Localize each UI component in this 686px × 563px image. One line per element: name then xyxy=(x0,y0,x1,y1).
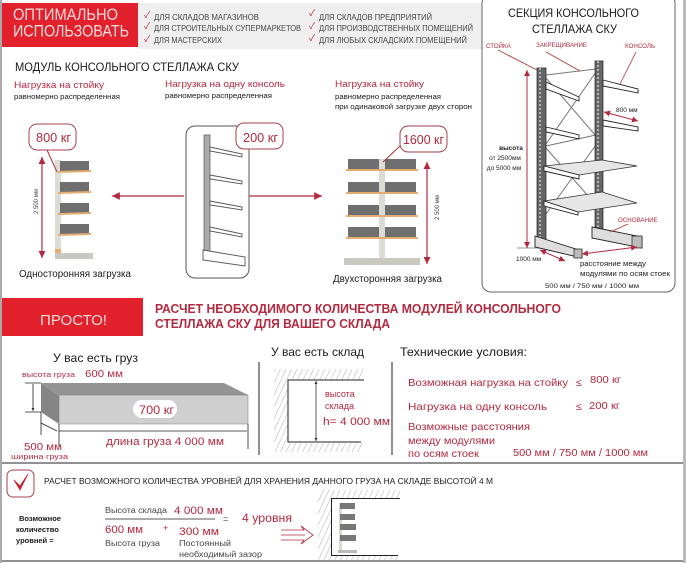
arrow: outline xyxy=(281,526,313,544)
section: cargo: длина груза 4 000 мм xyxy=(106,436,224,448)
heading: calculation: РАСЧЕТ НЕОБХОДИМОГО КОЛИЧЕСТВА МОДУЛЕЙ КОНСОЛЬНОГО xyxy=(155,301,561,316)
banner: optimal use: ДЛЯ СТРОИТЕЛЬНЫХ СУПЕРМАРКЕТОВ xyxy=(154,24,301,33)
formula xyxy=(16,505,292,559)
banner: optimal use: ✓ xyxy=(309,8,316,18)
diagram: small rack in warehouse xyxy=(318,490,400,561)
section: cargo: ширина груза xyxy=(11,452,69,461)
diagram: double-sided rack xyxy=(333,126,447,285)
banner: optimal use: ✓ xyxy=(309,33,316,43)
formula: + xyxy=(163,523,168,533)
section: cargo xyxy=(11,351,248,461)
section: technical conditions: Возможные расстояния xyxy=(408,421,530,433)
section: technical conditions: между модулями xyxy=(408,435,495,447)
heading: module: МОДУЛЬ КОНСОЛЬНОГО СТЕЛЛАЖА СКУ xyxy=(15,60,239,74)
banner: optimal use: ✓ xyxy=(309,21,316,31)
formula: Высота склада xyxy=(105,506,168,515)
formula: Возможное xyxy=(19,514,61,523)
arrow: right xyxy=(249,195,322,197)
formula: количество xyxy=(16,525,59,534)
formula: необходимый зазор xyxy=(179,550,263,559)
section: cargo: 500 мм xyxy=(24,441,62,453)
arrow: left xyxy=(112,195,184,197)
callouts: СТОЙКА xyxy=(486,42,512,50)
heading: calculation: СТЕЛЛАЖА СКУ ДЛЯ ВАШЕГО СКЛАДА xyxy=(155,317,390,331)
formula: = xyxy=(223,514,228,524)
text: load double sided xyxy=(335,79,472,111)
section: warehouse: высота xyxy=(325,389,355,399)
dimensions: высота xyxy=(499,145,523,152)
dimensions: 1000 мм xyxy=(516,256,542,263)
formula: 4 000 мм xyxy=(174,505,223,517)
formula: 600 мм xyxy=(105,524,143,536)
section: warehouse: h= 4 000 мм xyxy=(323,416,390,428)
rack drawing xyxy=(535,61,642,258)
cargo box xyxy=(41,383,248,424)
panel: console rack: 200 кг xyxy=(243,131,278,145)
formula: Постоянный xyxy=(179,539,231,548)
diagram: single-sided rack: Односторонняя загрузка xyxy=(19,269,131,280)
banner: optimal use: ДЛЯ ЛЮБЫХ СКЛАДСКИХ ПОМЕЩЕНИЙ xyxy=(319,36,467,45)
text: load per upright: Нагрузка на стойку xyxy=(14,80,104,91)
panel: rack section xyxy=(482,0,675,292)
formula: Высота груза xyxy=(105,539,161,548)
callouts xyxy=(486,42,658,261)
section: technical conditions: 500 мм / 750 мм / 1000 мм xyxy=(513,448,648,459)
banner: optimal use xyxy=(2,3,482,49)
section: technical conditions xyxy=(400,345,648,460)
section: technical conditions: ≤ xyxy=(576,377,582,389)
section: technical conditions: Нагрузка на одну консоль xyxy=(408,401,548,413)
text: load per console: равномерно распределенная xyxy=(165,93,272,100)
section: technical conditions: Технические условия: xyxy=(400,345,527,359)
banner: optimal use: ✓ xyxy=(144,34,151,44)
callouts: ОСНОВАНИЕ xyxy=(618,217,658,224)
section: warehouse xyxy=(271,345,390,452)
icon: check xyxy=(7,470,34,497)
dimensions: от 2500мм xyxy=(489,155,521,162)
heading: levels calculation: РАСЧЕТ ВОЗМОЖНОГО КОЛИЧЕСТВА УРОВНЕЙ ДЛЯ ХРАНЕНИЯ ДАННОГО ГРУЗА НА СКЛАДЕ ВЫСОТОЙ 4 М xyxy=(44,475,493,486)
section: technical conditions: по осям стоек xyxy=(408,448,479,460)
callouts: ЗАКРЕЩИВАНИЕ xyxy=(536,42,587,49)
text: load per upright xyxy=(14,80,120,101)
text: load per console xyxy=(165,79,285,100)
diagram: single-sided rack: 800 кг xyxy=(36,131,71,145)
section title: СЕКЦИЯ КОНСОЛЬНОГО xyxy=(508,6,639,20)
diagram: double-sided rack: 1600 кг xyxy=(403,133,444,147)
formula: 4 уровня xyxy=(242,511,292,525)
text: load per upright: равномерно распределенная xyxy=(14,94,120,101)
formula: уровней = xyxy=(16,536,54,545)
dimensions: расстояние между xyxy=(580,261,647,268)
diagram: single-sided rack: 2 500 мм xyxy=(34,189,40,214)
section: warehouse: У вас есть склад xyxy=(271,345,364,359)
callouts: КОНСОЛЬ xyxy=(625,43,655,50)
section: technical conditions: 800 кг xyxy=(590,374,621,386)
banner: optimal use: ✓ xyxy=(144,21,151,31)
section: cargo: У вас есть груз xyxy=(53,351,138,365)
diagram: double-sided rack: 2 500 мм xyxy=(435,195,441,220)
banner: optimal use: ДЛЯ СКЛАДОВ МАГАЗИНОВ xyxy=(154,13,259,22)
cargo box: 700 кг xyxy=(139,405,174,417)
section: technical conditions: ≤ xyxy=(576,401,582,413)
banner: optimal use: ДЛЯ ПРОИЗВОДСТВЕННЫХ ПОМЕЩЕНИЙ xyxy=(319,24,473,33)
dimensions: 500 мм / 750 мм / 1000 мм xyxy=(545,283,640,290)
section: technical conditions: Возможная нагрузка на стойку xyxy=(408,377,569,389)
dimensions: 800 мм xyxy=(616,107,638,114)
banner: simple xyxy=(2,298,143,336)
banner: optimal use: ИСПОЛЬЗОВАТЬ xyxy=(13,22,129,40)
section: technical conditions: 200 кг xyxy=(589,400,620,412)
text: load double sided: Нагрузка на стойку xyxy=(335,79,424,90)
banner: optimal use: ОПТИМАЛЬНО xyxy=(13,6,118,24)
text: load per console: Нагрузка на одну консоль xyxy=(165,79,285,90)
banner: simple: ПРОСТО! xyxy=(40,312,107,329)
text: load double sided: при одинаковой загрузке двух сторон xyxy=(335,103,472,111)
banner: optimal use: ДЛЯ МАСТЕРСКИХ xyxy=(154,36,223,45)
section title: СТЕЛЛАЖА СКУ xyxy=(532,22,617,36)
diagram: single-sided rack xyxy=(19,124,131,280)
banner: optimal use: ДЛЯ СКЛАДОВ ПРЕДПРИЯТИЙ xyxy=(319,13,432,22)
section: cargo: высота груза xyxy=(22,370,76,379)
diagram: double-sided rack: Двухсторонняя загрузка xyxy=(333,274,442,285)
section: cargo: 600 мм xyxy=(85,368,123,380)
dimensions: до 5000 мм xyxy=(487,165,522,172)
panel: console rack xyxy=(186,123,283,278)
heading: calculation xyxy=(155,301,561,331)
formula: 300 мм xyxy=(179,526,219,538)
section title xyxy=(508,6,639,36)
dimensions: модулями по осям стоек xyxy=(580,271,671,278)
text: load double sided: равномерно распределенная xyxy=(335,94,441,101)
banner: optimal use: ✓ xyxy=(144,10,151,20)
section: warehouse: склада xyxy=(325,401,354,411)
dimensions xyxy=(487,107,671,290)
